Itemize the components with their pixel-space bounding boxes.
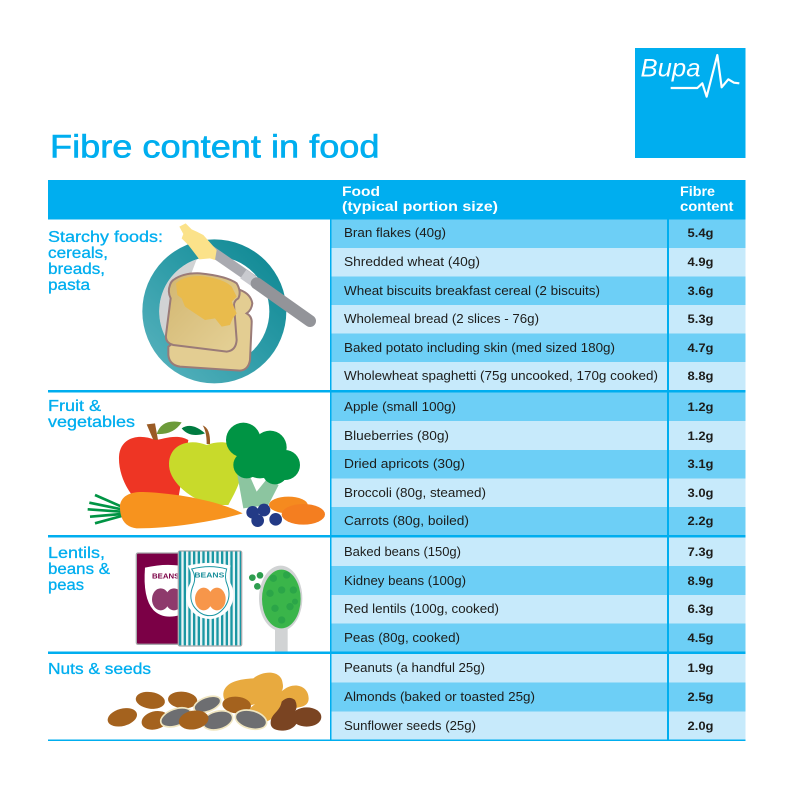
panel: lentils, beans and peas: 6.3g [688, 602, 714, 616]
panel: fruit and vegetables: vegetables [48, 414, 135, 431]
panel: starchy foods: Baked potato including skin (med sized 180g) [344, 341, 615, 355]
panel: fruit and vegetables: Fruit & [48, 398, 101, 415]
panel: fruit and vegetables: 2.2g [688, 514, 714, 528]
panel: starchy foods: 4.7g [688, 341, 714, 355]
panel: fruit and vegetables: 3.1g [688, 457, 714, 471]
panel: lentils, beans and peas: Baked beans (150g) [344, 545, 461, 559]
panel: starchy foods: cereals, [48, 245, 108, 262]
panel: starchy foods: Wholemeal bread (2 slices - 76g) [344, 312, 539, 326]
panel: nuts and seeds: 2.5g [688, 690, 714, 704]
panel: starchy foods: 5.3g [688, 312, 714, 326]
panel: lentils, beans and peas: Red lentils (100g, cooked) [344, 602, 499, 616]
panel: starchy foods: Starchy foods: [48, 229, 163, 246]
panel: starchy foods: 3.6g [688, 284, 714, 298]
divider [48, 535, 746, 538]
panel: starchy foods: breads, [48, 261, 105, 278]
panel: starchy foods: Wholewheat spaghetti (75g uncooked, 170g cooked) [344, 369, 658, 383]
logo: Bupa [635, 48, 746, 158]
panel: starchy foods [48, 220, 746, 390]
panel: nuts and seeds: Sunflower seeds (25g) [344, 719, 476, 733]
panel: starchy foods: 5.4g [688, 226, 714, 240]
panel: fruit and vegetables: 3.0g [688, 486, 714, 500]
panel: fruit and vegetables: 1.2g [688, 429, 714, 443]
panel: starchy foods: Shredded wheat (40g) [344, 255, 480, 269]
panel: starchy foods: Bran flakes (40g) [344, 226, 446, 240]
panel: starchy foods: pasta [48, 277, 90, 294]
icon: bean cans and spoon of peas: BEANS [152, 572, 179, 581]
divider [48, 740, 746, 741]
table header: (typical portion size) [342, 199, 498, 214]
panel: fruit and vegetables: 1.2g [688, 400, 714, 414]
divider [48, 652, 746, 654]
panel: fruit and vegetables: Apple (small 100g) [344, 400, 456, 414]
panel: nuts and seeds: 2.0g [688, 719, 714, 733]
panel: fruit and vegetables: Carrots (80g, boiled) [344, 514, 469, 528]
panel: nuts and seeds: Peanuts (a handful 25g) [344, 661, 485, 675]
table header: Fibre [680, 184, 716, 199]
panel: starchy foods: 8.8g [688, 369, 714, 383]
table header: content [680, 199, 734, 214]
panel: lentils, beans and peas: Kidney beans (100g) [344, 574, 466, 588]
panel: fruit and vegetables: Dried apricots (30g) [344, 457, 465, 471]
panel: lentils, beans and peas: 8.9g [688, 574, 714, 588]
icon: bean cans and spoon of peas: BEANS [194, 571, 224, 580]
panel: fruit and vegetables: Blueberries (80g) [344, 429, 449, 443]
panel: lentils, beans and peas: Lentils, [48, 545, 105, 562]
logo: Bupa: Bupa [640, 54, 701, 82]
panel: lentils, beans and peas: 7.3g [688, 545, 714, 559]
icon: nuts and seeds pile [106, 673, 321, 733]
panel: starchy foods: Wheat biscuits breakfast cereal (2 biscuits) [344, 284, 600, 298]
panel: lentils, beans and peas: 4.5g [688, 631, 714, 645]
panel: lentils, beans and peas: Peas (80g, cooked) [344, 631, 460, 645]
panel: nuts and seeds: Almonds (baked or toasted 25g) [344, 690, 535, 704]
panel: nuts and seeds: 1.9g [688, 661, 714, 675]
table header: Food [342, 184, 380, 199]
panel: starchy foods: 4.9g [688, 255, 714, 269]
column line [667, 219, 669, 741]
panel: lentils, beans and peas: beans & [48, 561, 110, 578]
panel: lentils, beans and peas: peas [48, 577, 84, 594]
title: Fibre content in food [50, 129, 380, 165]
column line [330, 219, 332, 741]
panel: nuts and seeds [48, 654, 746, 740]
panel: fruit and vegetables: Broccoli (80g, steamed) [344, 486, 486, 500]
divider [48, 390, 746, 392]
panel: fruit and vegetables [48, 392, 746, 535]
icon: toast on plate with butter knife [142, 223, 310, 383]
table header [48, 180, 746, 220]
panel: lentils, beans and peas [48, 538, 746, 652]
icon: fruit and vegetables group [88, 422, 325, 528]
icon: bean cans and spoon of peas [136, 551, 302, 652]
panel: nuts and seeds: Nuts & seeds [48, 661, 151, 678]
